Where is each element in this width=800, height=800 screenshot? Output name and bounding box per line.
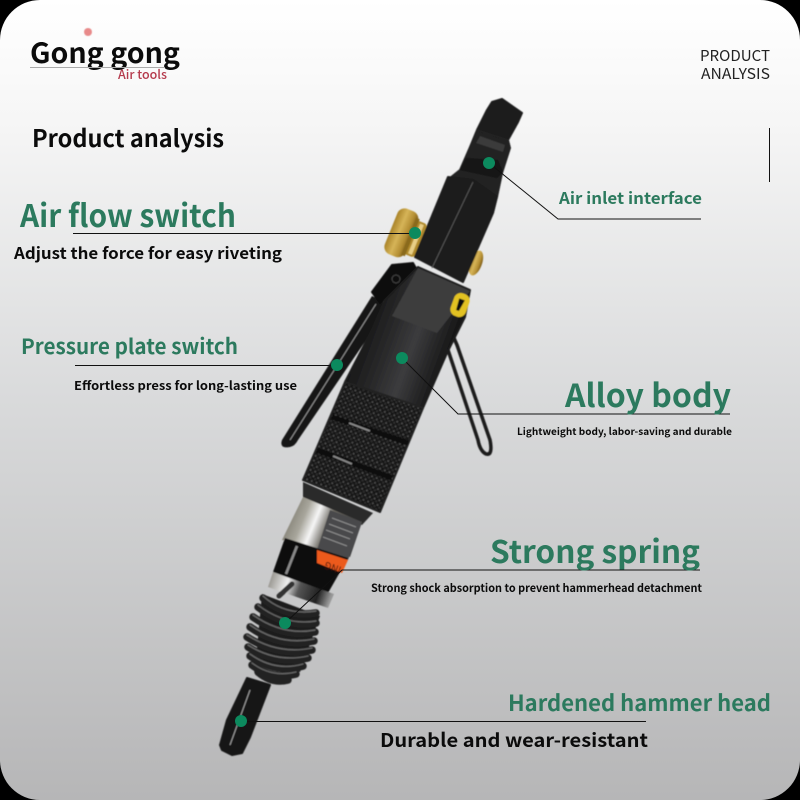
corner tag: product analysis [700, 45, 770, 84]
steel shaft [282, 497, 362, 557]
callout: pressure plate switch: Pressure plate switch [21, 331, 238, 361]
small brass screw [466, 249, 486, 277]
callout: pressure plate switch [21, 331, 343, 394]
callout: strong spring [279, 527, 702, 629]
callout: air flow switch [13, 191, 421, 264]
corner tag: product analysis: PRODUCT [700, 45, 770, 66]
orange warning label: ING [322, 559, 343, 578]
spring [247, 584, 320, 681]
knurled grip [303, 382, 423, 512]
right wire loop [430, 283, 491, 454]
callout: strong spring: Strong spring [490, 527, 700, 572]
brand name: Gong gong [30, 32, 180, 72]
callout: air flow switch: Adjust the force for easy riveting [13, 240, 282, 264]
steel ring [268, 572, 334, 608]
callout: hardened hammer head: Hardened hammer head [508, 686, 771, 718]
product image: pneumatic rivet hammer [220, 99, 522, 755]
yellow label [448, 291, 472, 319]
callout: air inlet interface: Air inlet interface [558, 185, 702, 209]
print area [317, 510, 362, 560]
black band [273, 538, 348, 593]
heading: product analysis: Product analysis [32, 119, 224, 154]
hex body [415, 177, 497, 282]
dark collar [303, 482, 373, 525]
corner tag: product analysis: ANALYSIS [701, 63, 770, 84]
brass knob [382, 206, 430, 263]
callout: alloy body: Lightweight body, labor-saving and durable [517, 423, 732, 438]
pressure plate lever [281, 263, 417, 447]
callout: alloy body [396, 352, 732, 438]
air inlet plug [450, 99, 522, 197]
callout: air inlet interface [483, 157, 702, 219]
callout: hardened hammer head [235, 686, 771, 753]
callout: hardened hammer head: Durable and wear-resistant [380, 726, 648, 753]
callout: alloy body: Alloy body [564, 371, 731, 417]
orange warning label [317, 550, 348, 578]
callout: pressure plate switch: Effortless press for long-lasting use [74, 377, 297, 394]
hammer head tip [220, 678, 270, 755]
brand subtitle: Air tools [118, 64, 167, 83]
callout: air flow switch: Air flow switch [19, 191, 236, 236]
icon: logo mark [84, 28, 92, 36]
callout: strong spring: Strong shock absorption to prevent hammerhead detachment [371, 580, 702, 596]
alloy body [345, 267, 470, 408]
logo [30, 28, 180, 83]
logo underline [30, 67, 165, 68]
